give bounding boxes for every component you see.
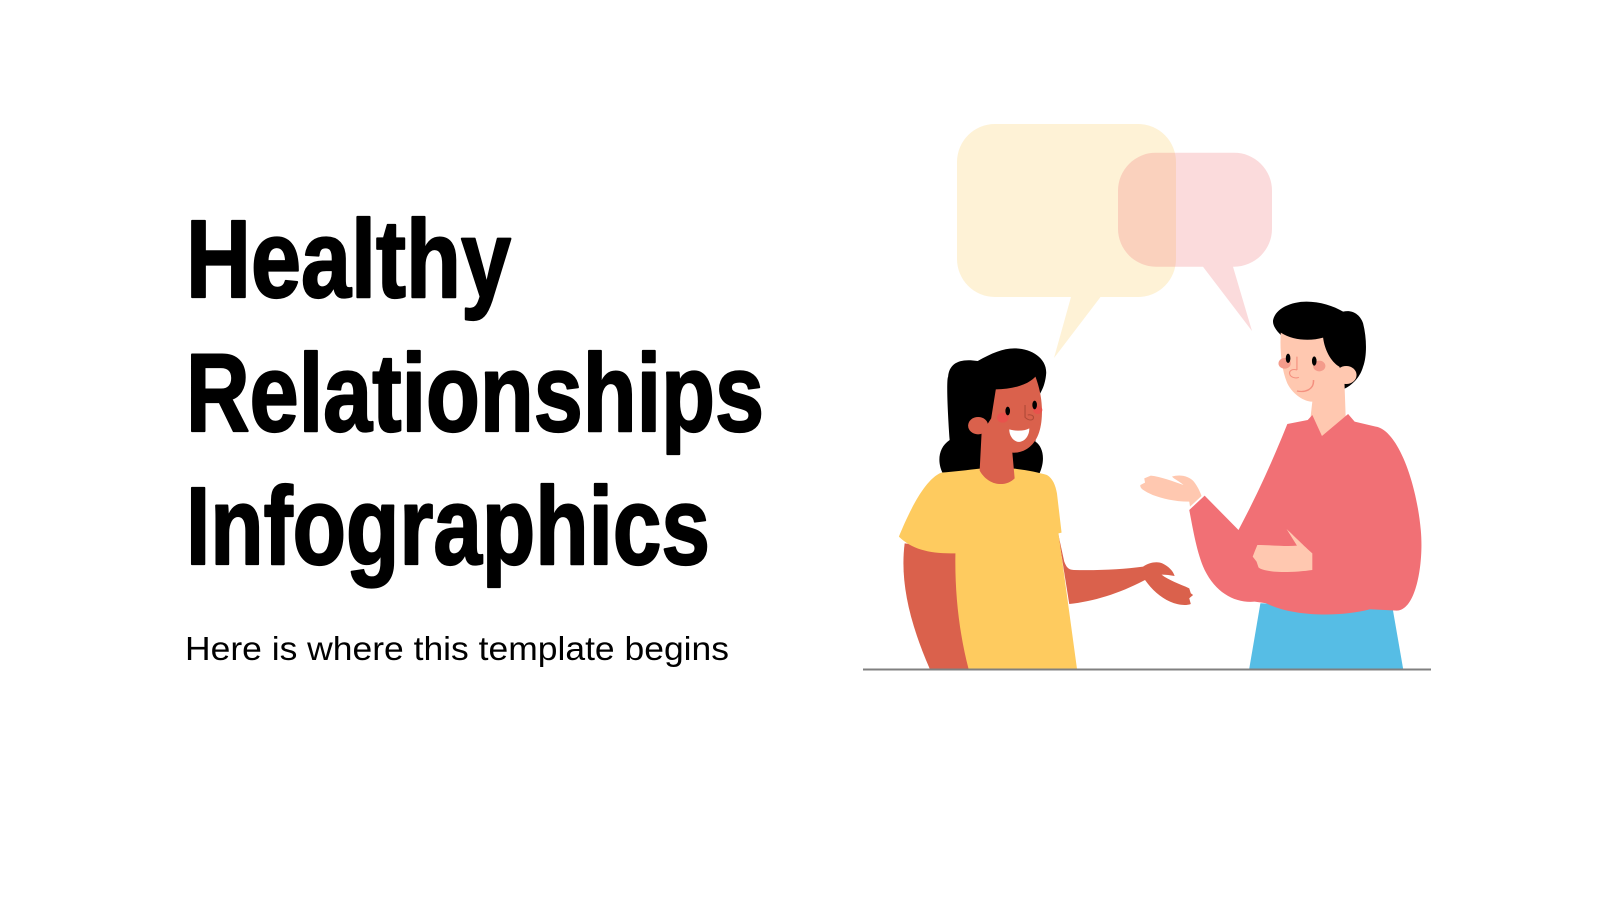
hair — [1273, 302, 1366, 389]
face details — [1278, 354, 1325, 391]
subtitle: Here is where this template begins — [185, 630, 729, 667]
hand on arm — [1253, 529, 1312, 572]
title: Infographics — [186, 465, 710, 588]
title: Healthy — [186, 198, 511, 321]
illustration: man — [1140, 302, 1421, 669]
sweater — [1189, 414, 1421, 615]
title: Relationships — [186, 332, 764, 455]
ear — [968, 417, 988, 434]
t-shirt — [899, 469, 1077, 669]
near arm — [903, 543, 970, 669]
speech bubble: yellow — [957, 124, 1176, 358]
speech bubble: pink — [1118, 153, 1272, 331]
illustration: woman — [899, 348, 1193, 669]
far arm and hand — [1058, 532, 1193, 605]
hair — [939, 348, 1046, 474]
neck and face — [1280, 333, 1346, 438]
neck and face — [980, 377, 1042, 484]
title — [186, 198, 764, 588]
ground line — [863, 668, 1431, 670]
ear — [1336, 366, 1357, 384]
extended hand — [1140, 475, 1202, 507]
face details — [997, 401, 1042, 442]
trousers — [1249, 603, 1403, 669]
